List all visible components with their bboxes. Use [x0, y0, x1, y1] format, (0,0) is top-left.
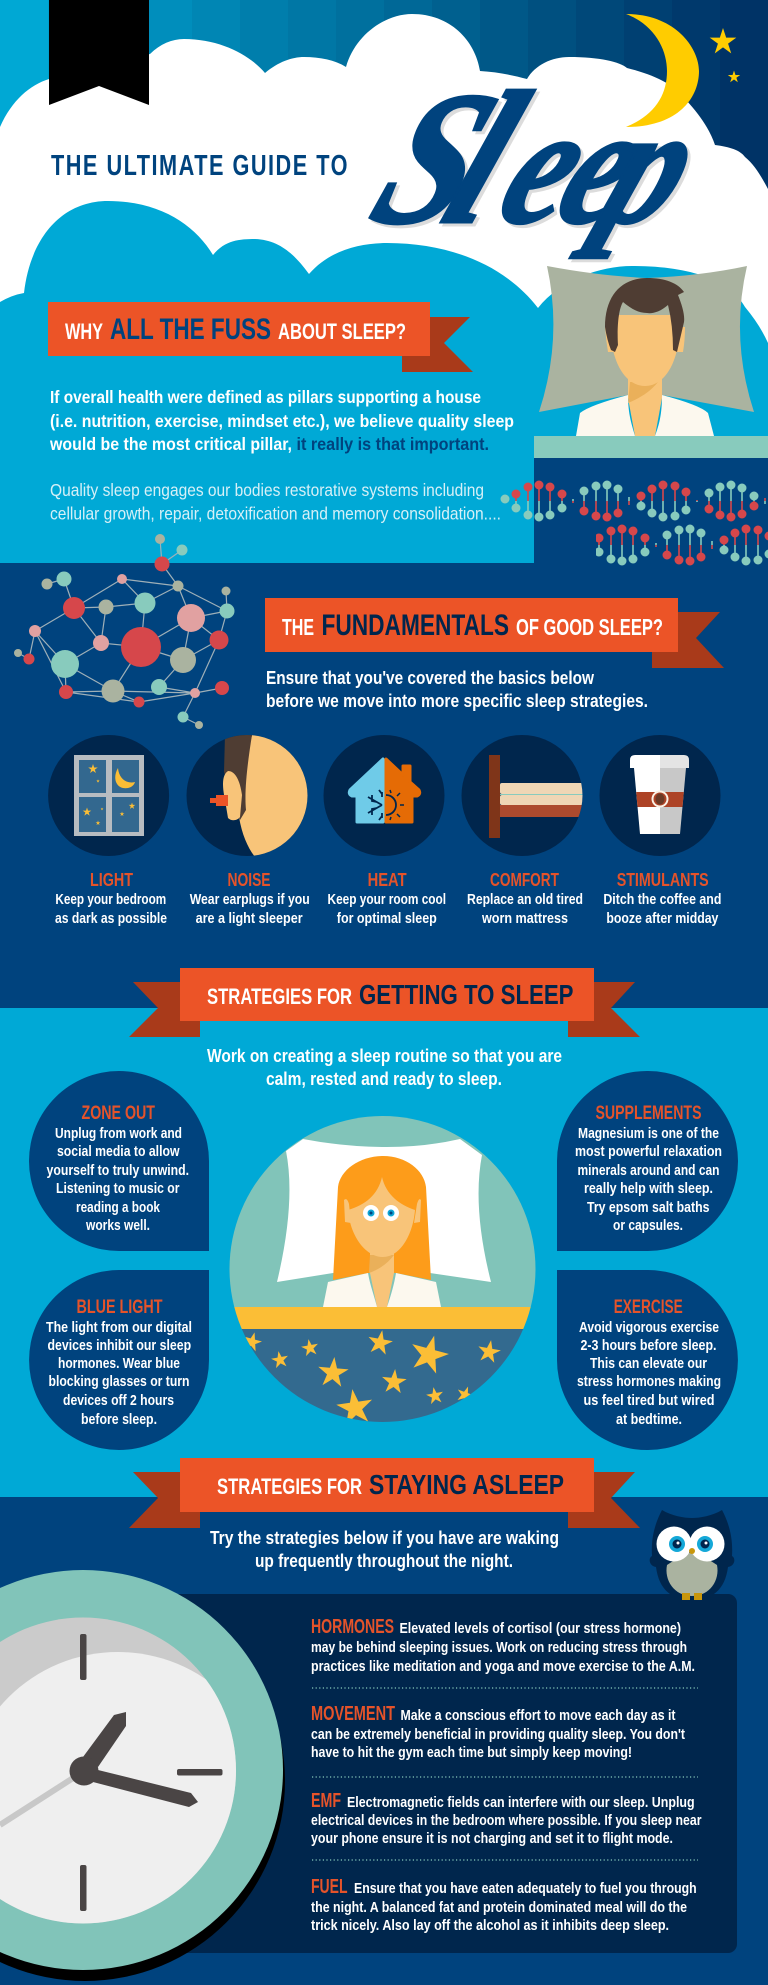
panel: zone out: Unplug from work and — [55, 1125, 182, 1142]
item: stimulants: booze after midday — [606, 910, 719, 927]
text block: pillars intro: it really is that important. — [296, 434, 489, 454]
title: e — [481, 77, 619, 262]
title — [51, 53, 737, 266]
item: light — [55, 869, 167, 927]
text block: getting to sleep intro: Work on creating a sleep routine so that you are — [207, 1046, 562, 1066]
mint band — [534, 436, 768, 458]
panel: exercise — [557, 1270, 738, 1450]
item: hormones: HORMONES — [311, 1616, 394, 1638]
item: heat: for optimal sleep — [337, 910, 437, 927]
item: movement: can be extremely beneficial in providing quality sleep. You don't — [311, 1726, 685, 1743]
text block: pillars intro: would be the most critical pillar, — [49, 434, 292, 454]
text block: restorative systems — [50, 480, 501, 524]
white cloud — [0, 14, 768, 400]
title: p — [569, 74, 726, 259]
item: emf — [311, 1790, 702, 1847]
item: hormones: practices like meditation and yoga and move exercise to the A.M. — [311, 1658, 695, 1675]
panel: zone out: works well. — [85, 1217, 150, 1234]
text block: pillars intro: (i.e. nutrition, exercise, mindset etc.), we believe quality sleep — [50, 411, 514, 431]
panel: exercise: at bedtime. — [616, 1411, 682, 1428]
title: e — [478, 74, 616, 259]
panel: exercise: stress hormones making — [577, 1373, 721, 1390]
panel: zone out: Listening to music or — [56, 1180, 180, 1197]
item: heat — [328, 869, 446, 927]
item: movement: have to hit the gym each time but simply keep moving! — [311, 1744, 632, 1761]
item: stimulants — [603, 869, 721, 927]
moon and stars — [626, 14, 740, 127]
text block: fundamentals intro: Ensure that you've covered the basics below — [266, 668, 595, 688]
item: light: LIGHT — [90, 869, 134, 890]
heading: staying asleep — [129, 1458, 640, 1528]
title: THE ULTIMATE GUIDE TO — [51, 150, 349, 182]
illustration: clock — [0, 1570, 285, 1981]
item: comfort: COMFORT — [490, 869, 560, 890]
item: light: as dark as possible — [55, 910, 167, 927]
text block: pillars intro — [49, 387, 514, 454]
panel: blue light: blocking glasses or turn — [48, 1373, 190, 1390]
item: fuel — [311, 1876, 697, 1934]
item: hormones: Elevated levels of cortisol (our stress hormone) — [400, 1620, 681, 1637]
panel: supplements: most powerful relaxation — [575, 1143, 722, 1160]
item: hormones — [311, 1616, 695, 1675]
title: p — [572, 77, 729, 262]
heading: why all the fuss: ABOUT SLEEP? — [278, 319, 406, 344]
panel: exercise: This can elevate our — [590, 1355, 707, 1372]
panel: blue light: before sleep. — [81, 1411, 157, 1428]
item: noise: are a light sleeper — [196, 910, 303, 927]
heading: getting to sleep: GETTING TO SLEEP — [359, 979, 574, 1010]
heading: fundamentals: FUNDAMENTALS — [322, 609, 509, 642]
illustration: man in bed — [539, 266, 754, 436]
item: emf: Electromagnetic fields can interfere with our sleep. Unplug — [347, 1794, 695, 1811]
heading: getting to sleep — [129, 968, 640, 1037]
heading: why all the fuss: ALL THE FUSS — [110, 313, 271, 346]
panel: exercise: 2-3 hours before sleep. — [580, 1337, 716, 1354]
title: e — [538, 77, 677, 262]
panel: exercise: EXERCISE — [614, 1297, 683, 1318]
item: noise: Wear earplugs if you — [190, 891, 310, 908]
item: stimulants: Ditch the coffee and — [603, 891, 721, 908]
item: movement: Make a conscious effort to move each day as it — [400, 1707, 676, 1724]
panel: supplements: or capsules. — [613, 1217, 683, 1234]
heading: staying asleep: STAYING ASLEEP — [369, 1469, 564, 1500]
item: noise: NOISE — [228, 869, 270, 890]
text block: fundamentals intro — [266, 668, 648, 711]
panel: blue light: BLUE LIGHT — [76, 1297, 163, 1318]
heading: why all the fuss: WHY — [65, 319, 103, 344]
illustration: molecule network — [14, 534, 234, 729]
illustration: woman in bed — [229, 1116, 536, 1426]
icon: comfort bed — [462, 735, 584, 856]
item: heat: HEAT — [368, 869, 407, 890]
header night sky — [0, 0, 768, 300]
icon: owl — [650, 1510, 734, 1600]
panel: blue light — [29, 1270, 209, 1450]
item: hormones: may be behind sleeping issues. Work on reducing stress through — [311, 1639, 687, 1656]
item: heat: Keep your room cool — [328, 891, 446, 908]
item: comfort: Replace an old tired — [467, 891, 583, 908]
panel: zone out: reading a book — [76, 1199, 161, 1216]
heading: why all the fuss — [48, 302, 473, 372]
panel: zone out: social media to allow — [57, 1143, 180, 1160]
text block: restorative systems: Quality sleep engages our bodies restorative systems including — [50, 480, 484, 500]
panel: blue light: The light from our digital — [46, 1319, 192, 1336]
icon: heat house — [324, 735, 444, 856]
text block: getting to sleep intro: calm, rested and ready to sleep. — [266, 1069, 502, 1089]
panel: zone out — [29, 1071, 209, 1251]
panel: blue light: hormones. Wear blue — [58, 1355, 180, 1372]
heading: fundamentals — [265, 598, 724, 668]
panel: zone out: yourself to truly unwind. — [46, 1162, 189, 1179]
title: e — [535, 74, 674, 259]
item: movement — [311, 1703, 685, 1761]
item: movement: MOVEMENT — [311, 1703, 395, 1725]
item: fuel: FUEL — [311, 1876, 348, 1898]
panel: exercise: us feel tired but wired — [584, 1392, 714, 1409]
title: l — [424, 56, 553, 266]
panel: zone out: ZONE OUT — [82, 1103, 155, 1124]
light section: getting to sleep — [0, 1008, 768, 1497]
item: noise — [190, 869, 310, 927]
black bookmark ribbon — [49, 0, 149, 105]
heading: fundamentals: OF GOOD SLEEP? — [516, 614, 663, 640]
navy section: staying asleep — [0, 1497, 768, 1985]
title: l — [421, 53, 550, 263]
text block: staying asleep intro: Try the strategies below if you have are waking — [210, 1528, 559, 1548]
text block: pillars intro: If overall health were defined as pillars supporting a house — [50, 387, 481, 407]
panel: staying asleep strategies — [150, 1594, 737, 1953]
item: fuel: trick nicely. Also lay off the alcohol as it inhibits deep sleep. — [311, 1917, 669, 1934]
panel: supplements: really help with sleep. — [584, 1180, 713, 1197]
panel: blue light: devices inhibit our sleep — [48, 1337, 191, 1354]
panel: why all the fuss background — [0, 201, 768, 563]
item: emf: your phone ensure it is not charging and set it to flight mode. — [311, 1830, 673, 1847]
panel: supplements: Magnesium is one of the — [578, 1125, 719, 1142]
heading: staying asleep: STRATEGIES FOR — [217, 1474, 362, 1499]
panel: exercise: Avoid vigorous exercise — [579, 1319, 719, 1336]
panel: supplements: minerals around and can — [578, 1162, 720, 1179]
text block: staying asleep intro: up frequently throughout the night. — [255, 1551, 513, 1571]
panel: supplements: SUPPLEMENTS — [596, 1103, 702, 1124]
text block: staying asleep intro — [210, 1528, 559, 1571]
navy section: fundamentals — [0, 458, 768, 1008]
icon: stimulants coffee cup — [600, 735, 720, 856]
item: stimulants: STIMULANTS — [617, 869, 709, 890]
heading: getting to sleep: STRATEGIES FOR — [207, 984, 352, 1009]
item: comfort — [467, 869, 583, 927]
title: S — [348, 53, 523, 263]
text block: fundamentals intro: before we move into more specific sleep strategies. — [266, 691, 648, 711]
item: emf: EMF — [311, 1790, 341, 1812]
panel: supplements — [557, 1071, 738, 1251]
item: fuel: Ensure that you have eaten adequately to fuel you through — [354, 1880, 697, 1897]
text block: getting to sleep intro — [207, 1046, 562, 1089]
illustration: DNA strands — [505, 485, 768, 561]
panel: blue light: devices off 2 hours — [63, 1392, 174, 1409]
panel: supplements: Try epsom salt baths — [587, 1199, 710, 1216]
icon: light window — [48, 735, 169, 856]
text block: restorative systems: cellular growth, repair, detoxification and memory consolidation.... — [50, 504, 501, 524]
title: S — [351, 56, 526, 266]
icon: noise ear — [186, 735, 308, 856]
item: comfort: worn mattress — [481, 910, 568, 927]
item: light: Keep your bedroom — [55, 891, 166, 908]
heading: fundamentals: THE — [282, 614, 314, 640]
item: fuel: the night. A balanced fat and protein dominated meal will do the — [311, 1899, 687, 1916]
